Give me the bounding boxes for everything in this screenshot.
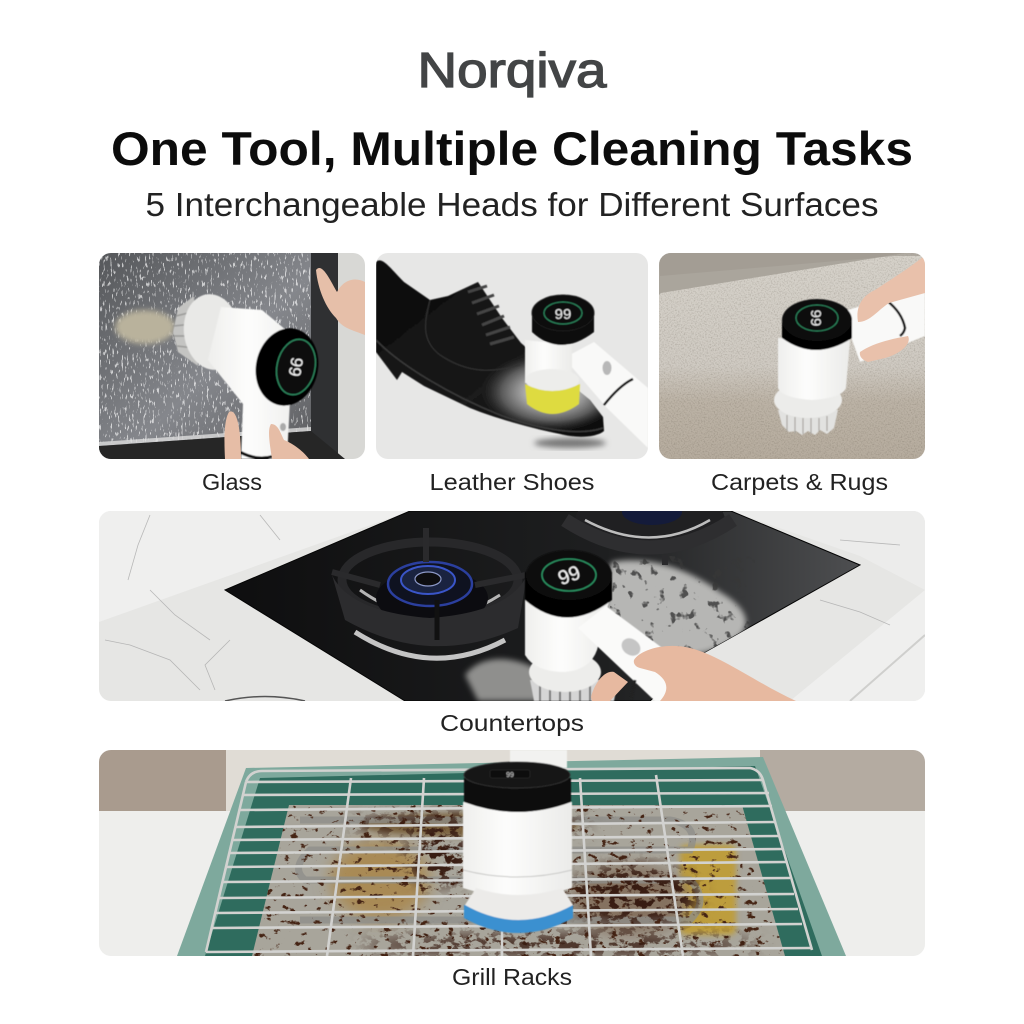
label: grill racks: Grill Racks xyxy=(452,964,572,990)
shoe shadow xyxy=(534,438,606,448)
black glass cooktop xyxy=(225,511,860,701)
hand xyxy=(591,646,796,701)
cleaning brush xyxy=(525,295,648,448)
subtitle: 5 Interchangeable Heads for Different Surfaces xyxy=(146,186,878,223)
hand holding frame xyxy=(316,268,365,335)
wet window pane xyxy=(99,253,313,459)
burner left xyxy=(332,528,527,658)
cleaning brush xyxy=(173,290,325,459)
window frame and wall xyxy=(99,253,365,459)
panel: grill racks xyxy=(99,750,925,956)
panel background xyxy=(376,253,648,459)
label: glass: Glass xyxy=(202,469,262,495)
cleaning brush xyxy=(774,285,925,435)
green tray xyxy=(177,757,846,956)
panel: glass xyxy=(99,253,365,459)
label: leather shoes: Leather Shoes xyxy=(430,469,594,495)
kitchen background xyxy=(99,750,925,956)
leather shoe xyxy=(376,260,622,437)
cleaning brush: 99 xyxy=(555,562,584,590)
cleaning brush xyxy=(524,550,666,701)
label: carpets and rugs: Carpets & Rugs xyxy=(711,469,888,495)
brand name: Norqiva xyxy=(418,44,607,98)
title: One Tool, Multiple Cleaning Tasks xyxy=(111,122,913,175)
wire rack xyxy=(206,768,812,956)
cleaning brush: 99 xyxy=(555,306,571,323)
panel: carpets and rugs xyxy=(659,253,925,459)
burner right xyxy=(562,511,736,565)
cleaning brush: 99 xyxy=(807,310,824,326)
panel: leather shoes xyxy=(376,253,648,459)
hand xyxy=(857,255,925,362)
hand holding handle xyxy=(224,411,309,459)
cleaning brush: 99 xyxy=(506,772,514,779)
panel: countertops xyxy=(99,511,925,701)
foam on cooktop xyxy=(465,556,755,701)
marble counter xyxy=(99,511,925,701)
carpet surface xyxy=(659,253,925,459)
cleaning brush: 99 xyxy=(285,356,307,378)
greasy metal pan xyxy=(250,800,790,956)
label: countertops: Countertops xyxy=(440,710,584,736)
cleaning brush xyxy=(463,750,573,933)
